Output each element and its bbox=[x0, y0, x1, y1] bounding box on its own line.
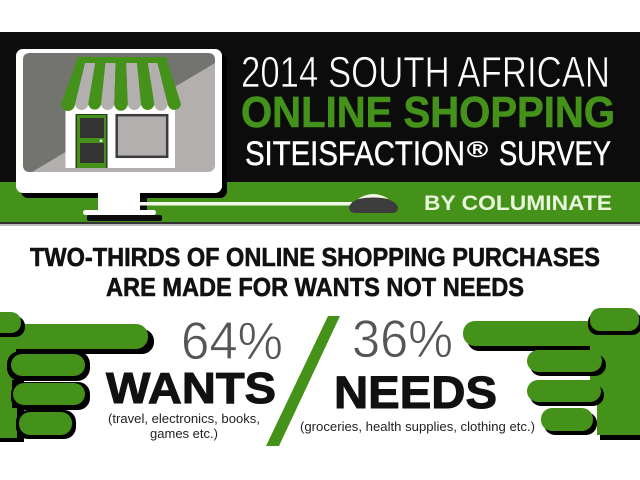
title line: Siteisfaction Survey: SITEISFACTION bbox=[245, 135, 465, 173]
needs examples: (groceries, health supplies, clothing etc.) bbox=[300, 419, 535, 434]
title line: Siteisfaction Survey bbox=[245, 135, 611, 173]
icon: right pointing hand bbox=[463, 308, 640, 440]
label: needs: NEEDS bbox=[334, 367, 497, 418]
icon: striped awning bbox=[61, 57, 181, 111]
wants examples: games etc.) bbox=[150, 426, 218, 441]
panel: header bbox=[0, 32, 640, 226]
title line: Online Shopping: ONLINE SHOPPING bbox=[241, 88, 615, 137]
divider slash bbox=[266, 316, 340, 446]
wants examples: (travel, electronics, books, bbox=[108, 411, 260, 426]
headline: ARE MADE FOR WANTS NOT NEEDS bbox=[106, 272, 524, 302]
title line: Siteisfaction Survey: SURVEY bbox=[499, 135, 611, 173]
icon: shop building bbox=[66, 105, 175, 168]
stat: 64%: 64% bbox=[181, 312, 283, 371]
headline bbox=[30, 242, 600, 302]
stat: 36%: 36% bbox=[352, 310, 453, 369]
wants examples bbox=[108, 411, 260, 441]
icon: mouse and cable bbox=[140, 194, 398, 213]
label: wants: WANTS bbox=[106, 364, 276, 413]
icon: computer monitor with shop bbox=[16, 49, 227, 221]
title line: Siteisfaction Survey: ® bbox=[467, 137, 488, 162]
icon: left pointing hand bbox=[0, 312, 154, 442]
byline: BY COLUMINATE bbox=[424, 192, 612, 215]
